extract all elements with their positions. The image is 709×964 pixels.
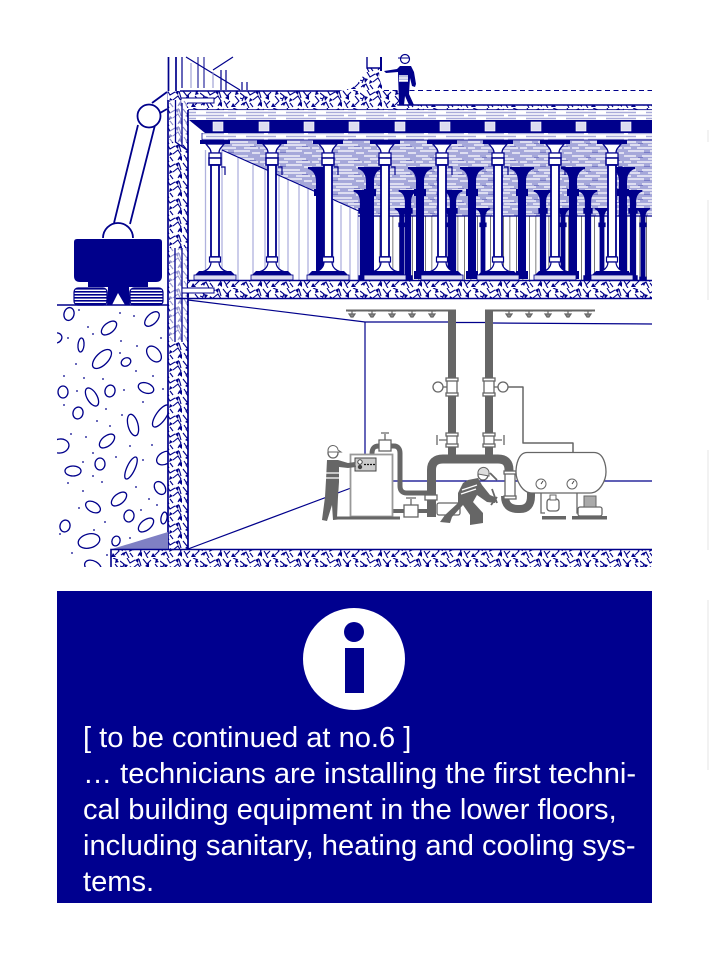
concrete pile and chute — [340, 57, 398, 108]
technician at cabinet — [322, 445, 356, 521]
dashed level line — [384, 90, 652, 92]
formwork planks and beam — [189, 110, 652, 140]
front props — [194, 140, 633, 280]
wall and upper scaffold lines — [168, 57, 247, 100]
side wall vertical lines — [204, 150, 359, 280]
upper slab with fresh concrete — [168, 91, 652, 110]
purple wedge at foundation — [112, 532, 168, 549]
room perspective lines — [188, 300, 652, 549]
far wall white section — [196, 132, 202, 140]
far floor vertical lines — [370, 216, 652, 281]
tracks — [74, 288, 107, 305]
faint right edge marks — [707, 130, 709, 770]
arm — [103, 92, 167, 238]
rear props row 1 — [308, 167, 635, 279]
diagonal wall line — [222, 150, 358, 212]
rear props row 2 — [354, 190, 642, 282]
body — [74, 239, 162, 287]
boiler cabinet — [333, 454, 400, 518]
kneeling technician — [440, 467, 497, 525]
excavator — [74, 92, 167, 305]
info panel background — [57, 591, 652, 903]
line: body 2: cal building equipment in the lower floors, — [83, 794, 617, 826]
info text block — [83, 722, 636, 898]
pipe fittings and gauges — [379, 378, 516, 517]
ground line — [57, 304, 168, 306]
line: body 1: … technicians are installing the first techni- — [83, 758, 636, 790]
line: continuation note: [ to be continued at no.6 ] — [83, 722, 411, 754]
back wall texture — [220, 140, 652, 216]
middle floor slab — [176, 280, 652, 299]
sprinkler system — [346, 310, 595, 317]
line: body 3: including sanitary, heating and cooling sys- — [83, 830, 636, 862]
worker on top of slab — [384, 54, 416, 105]
foundation slab — [111, 550, 652, 567]
rear props row 3 — [395, 208, 650, 282]
storage tank — [516, 452, 607, 520]
soil with stones — [57, 306, 168, 567]
line: body 4: tems. — [83, 866, 154, 898]
main pipework — [372, 310, 573, 517]
info icon — [303, 608, 405, 710]
formwork room with props — [194, 140, 652, 280]
concrete wall column — [168, 100, 188, 550]
